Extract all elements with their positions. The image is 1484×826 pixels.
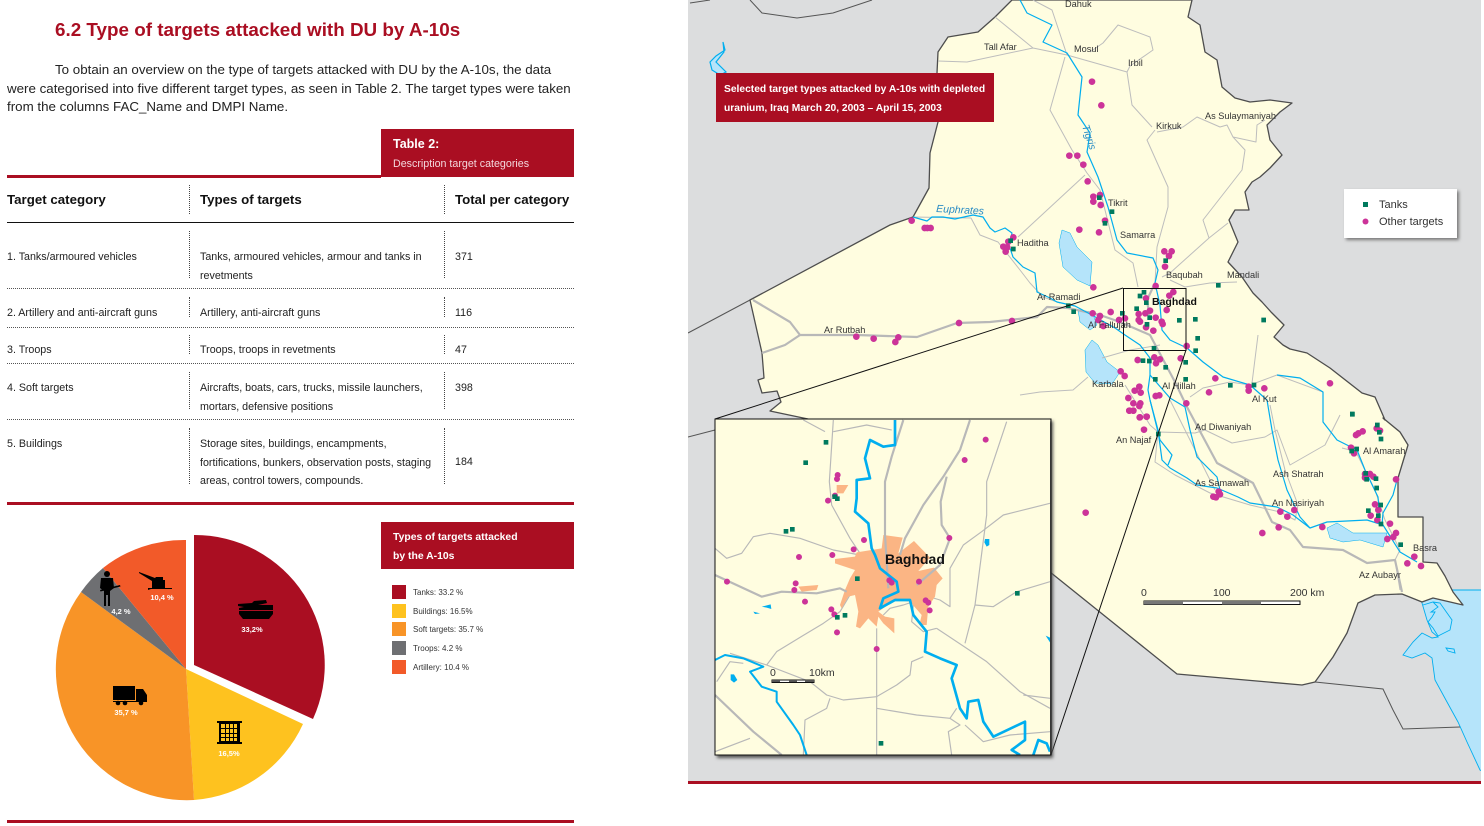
inset water bodies [731, 539, 1050, 683]
intro paragraph: from the columns FAC_Name and DMPI Name. [7, 99, 288, 114]
gulf water [1403, 590, 1484, 775]
map title banner [716, 73, 994, 122]
map scale bar: 200 km [1290, 587, 1325, 599]
city labels: Ar Ramadi [1037, 292, 1080, 302]
Iraq territory [750, 0, 1463, 685]
icon: soldier [100, 571, 120, 606]
text: Tanks: 33.2 % [413, 588, 463, 597]
city labels: Ar Rutbah [824, 325, 865, 335]
city labels: Al Hillah [1162, 381, 1196, 391]
label: Euphrates river: Euphrates [936, 203, 985, 218]
pie chart header box: Types of targets attacked [393, 532, 518, 543]
city labels: Karbala [1092, 379, 1125, 389]
inset label: Baghdad: Baghdad [885, 551, 945, 567]
table 2: target categories: Aircrafts, boats, cars, trucks, missile launchers, [200, 382, 423, 394]
pie chart legend [392, 585, 483, 674]
city labels: Irbil [1128, 58, 1143, 68]
pie chart header box: by the A-10s [393, 551, 454, 562]
artillery percentage: 10,4 % [150, 593, 174, 602]
map scale bar: 0 [1141, 587, 1147, 599]
main highways [753, 283, 1402, 592]
map scale bar: 100 [1213, 587, 1231, 599]
city labels: Haditha [1017, 238, 1050, 248]
city labels: Baqubah [1166, 270, 1203, 280]
city labels: Al Kut [1252, 394, 1277, 404]
table 2: target categories: Artillery, anti-aircraft guns [200, 307, 320, 319]
slice: troops [81, 568, 186, 669]
icon: building [217, 721, 242, 744]
slice: artillery [103, 540, 186, 669]
Baghdad inset map [715, 419, 1053, 758]
icon: truck [113, 686, 147, 705]
row 5: 5. Buildings [7, 438, 62, 450]
tank percentage: 33,2% [241, 625, 263, 634]
intro paragraph [7, 62, 571, 114]
target markers, north and centre [1092, 82, 1352, 417]
text: Soft targets: 35.7 % [413, 625, 483, 634]
city labels: Az Aubayr [1359, 570, 1401, 580]
table 2: target categories: 398 [455, 382, 473, 394]
label: Tigris river: Tigris [1079, 123, 1099, 152]
rivers [913, 0, 1417, 562]
city labels: Tall Afar [984, 42, 1017, 52]
inset major roads [715, 420, 970, 755]
intro paragraph: were categorised into five different target types, as seen in Table 2. The target types were taken [7, 80, 571, 96]
city labels: Ad Diwaniyah [1195, 422, 1251, 432]
table 2 header box [381, 129, 574, 177]
lakes and marshes [1059, 230, 1387, 547]
slice: buildings [186, 669, 303, 800]
pie chart: types of targets [56, 535, 325, 800]
city labels: Ash Shatrah [1273, 469, 1324, 479]
map base [688, 0, 1484, 781]
city labels: As Sulaymaniyah [1205, 111, 1276, 121]
map title banner: Selected target types attacked by A-10s with depleted [724, 84, 985, 95]
table 2: target categories: Storage sites, buildings, encampments, [200, 438, 387, 450]
text: Buildings: 16.5% [413, 607, 473, 616]
inset city area [798, 485, 943, 633]
row 2: 2. Artillery and anti-aircraft guns [7, 307, 157, 319]
map legend: Other targets [1379, 216, 1444, 228]
table caption: Description target categories [393, 158, 529, 170]
city labels: Tikrit [1108, 198, 1128, 208]
city labels: An Nasiriyah [1272, 498, 1324, 508]
syrian river [710, 42, 726, 75]
troops percentage: 4,2 % [111, 607, 131, 616]
table 2: target categories: fortifications, bunkers, observation posts, staging [200, 456, 431, 468]
map legend: Tanks [1379, 199, 1408, 211]
city labels: Mandali [1227, 270, 1259, 280]
Bubiyan island outline [1423, 602, 1455, 653]
slice: tanks (exploded) [194, 535, 325, 719]
row 3: 3. Troops [7, 344, 52, 356]
row 4: 4. Soft targets [7, 382, 74, 394]
inset thin roads [715, 420, 1050, 755]
icon: tank [238, 600, 273, 619]
table 2: target categories: 47 [455, 344, 467, 356]
table 2: target categories [7, 175, 574, 487]
icon: artillery gun [139, 572, 172, 590]
table 2: target categories: Troops, troops in revetments [200, 344, 336, 356]
inset rivers [715, 420, 1050, 755]
intro paragraph: To obtain an overview on the type of targets attacked with DU by the A-10s, the data [55, 62, 551, 77]
inset scale bar: 0 [770, 667, 776, 679]
text: Artillery: 10.4 % [413, 663, 469, 672]
soft targets percentage: 35,7 % [114, 708, 138, 717]
table 2: target categories: 116 [455, 307, 472, 319]
roads [913, 0, 1400, 590]
table 2: target categories: revetments [200, 270, 253, 282]
city labels: Mosul [1074, 44, 1099, 54]
zoom box around Baghdad [1124, 288, 1186, 350]
target markers, south [1086, 411, 1421, 566]
table 2: target categories: Target category [7, 192, 106, 207]
city labels: Kirkuk [1156, 121, 1182, 131]
map legend [1344, 189, 1459, 240]
text: Troops: 4.2 % [413, 644, 463, 653]
table 2: target categories: 184 [455, 456, 473, 468]
table 2: target categories: Tanks, armoured vehicles, armour and tanks in [200, 251, 422, 263]
row 1: 1. Tanks/armoured vehicles [7, 251, 137, 263]
pie chart header box [381, 522, 574, 569]
map scale bar [1141, 587, 1325, 604]
city labels: Al Amarah [1363, 446, 1405, 456]
table number: Table 2: [393, 137, 439, 151]
inset target markers [727, 440, 986, 649]
slice: soft targets [56, 592, 194, 800]
table 2: target categories: Total per category [455, 192, 569, 207]
city labels [824, 0, 1438, 580]
city labels: Samarra [1120, 230, 1156, 240]
buildings percentage: 16,5% [218, 749, 240, 758]
city labels: Basra [1413, 543, 1438, 553]
zoom connector lines [715, 288, 1186, 755]
target markers, west [856, 156, 1088, 342]
city labels: An Najaf [1116, 435, 1152, 445]
city labels: As Samawah [1195, 478, 1249, 488]
table 2: target categories: 371 [455, 251, 473, 263]
table 2: target categories: areas, control towers, compounds. [200, 475, 363, 487]
inset scale bar [770, 667, 835, 682]
map bottom rule [688, 781, 1481, 784]
neighbouring country borders [688, 0, 1460, 729]
label: Baghdad: Baghdad [1152, 296, 1197, 308]
table 2: target categories: Types of targets [200, 192, 302, 207]
title: 6.2 Type of targets attacked with DU by A-10s [55, 19, 460, 40]
map title banner: uranium, Iraq March 20, 2003 – April 15, 2003 [724, 103, 942, 114]
inset scale bar: 10km [809, 667, 835, 679]
map of Iraq with target locations [688, 0, 1481, 784]
table 2: target categories: mortars, defensive positions [200, 400, 333, 412]
city labels: Al Fallujah [1088, 320, 1131, 330]
